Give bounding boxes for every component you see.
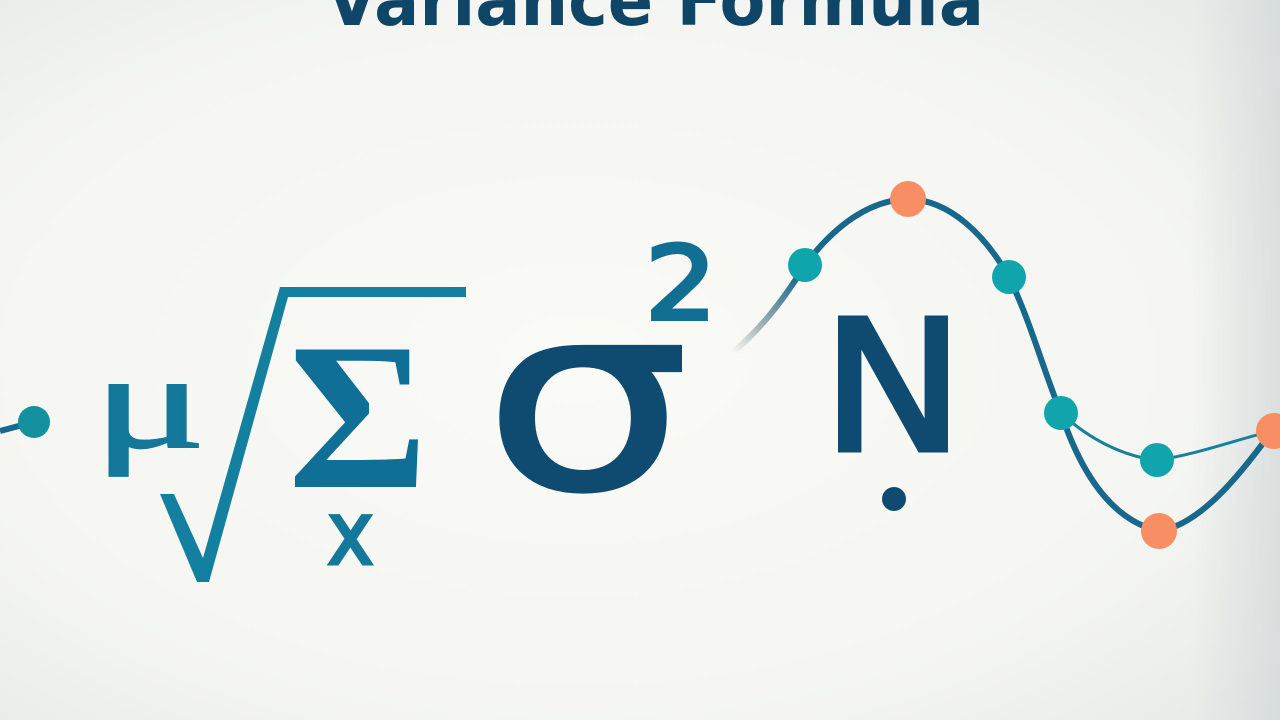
left point — [0, 406, 50, 438]
superscript 2: 2 — [645, 225, 717, 344]
symbol: N: N — [822, 282, 964, 493]
dot below N — [882, 487, 906, 511]
symbol: summation: Σ — [288, 301, 428, 533]
symbol: square root — [160, 287, 466, 582]
symbol: sigma: σ — [484, 249, 689, 549]
symbol: mu: μ — [93, 328, 206, 477]
data points — [788, 181, 1280, 549]
wave chart — [0, 181, 1280, 549]
symbol: x: x — [327, 482, 374, 585]
